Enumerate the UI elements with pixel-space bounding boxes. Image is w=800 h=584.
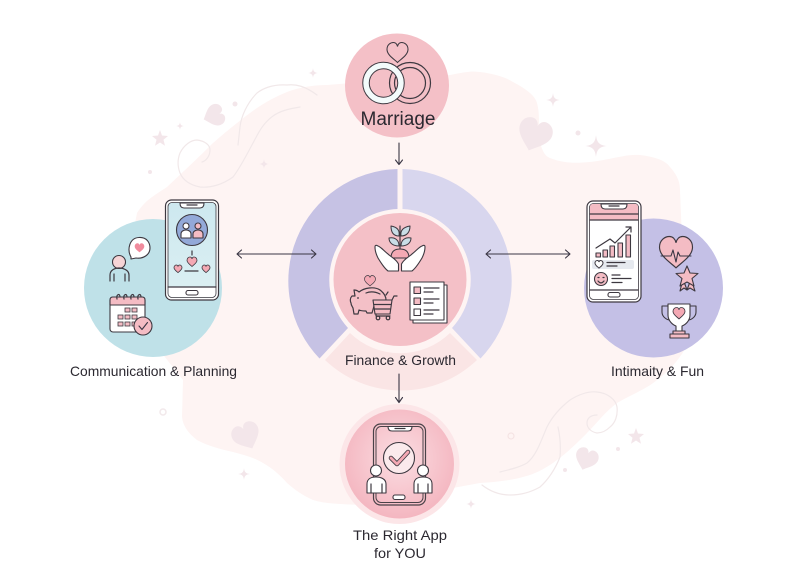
icon: trophy: [662, 304, 696, 338]
swirl: top left spiral: [178, 107, 300, 187]
arrow: Marriage to centre: [396, 143, 402, 164]
circle: [345, 34, 449, 138]
swirl: bottom right: [482, 427, 560, 495]
label: Communication & Planning: [70, 363, 237, 379]
heart: top left: [200, 102, 227, 130]
swirl: top left: [238, 85, 317, 145]
icon: person left: [367, 465, 386, 493]
swirl: bottom right spiral: [500, 392, 617, 472]
arrow: centre to right panel: [486, 250, 570, 258]
background decorations: [148, 68, 644, 509]
icon: piggy bank and cart: [350, 276, 397, 320]
label: Intimaity & Fun: [611, 363, 704, 379]
heart: bottom left: [228, 418, 265, 454]
icon: plant in hands: [375, 226, 425, 271]
panel: The Right App for YOU: [340, 404, 460, 561]
background blob: [120, 72, 690, 505]
icon: phone: [166, 200, 218, 300]
icon: checklist: [410, 282, 447, 323]
icon: heart: [387, 42, 408, 62]
label: Finance & Growth: [345, 352, 456, 368]
icon: calendar: [110, 295, 145, 332]
label: The Right App: [353, 527, 447, 543]
heart: top right: [513, 114, 556, 156]
icon: person: [110, 256, 129, 281]
icon: speech bubble: [129, 237, 150, 259]
icon: person right: [414, 465, 432, 493]
ring segment: bottom: [325, 333, 477, 390]
ring segment: right: [402, 169, 512, 358]
centre disc: [334, 213, 466, 346]
label: Marriage: [360, 109, 436, 130]
avatar: [176, 214, 208, 246]
halo: [340, 404, 460, 524]
panel: Communication & Planning: [70, 200, 237, 379]
circle: [84, 219, 222, 357]
icon: star award: [676, 266, 698, 291]
arrow: centre to The Right App: [396, 374, 402, 402]
sparkles: [148, 68, 644, 509]
circle: [345, 410, 454, 518]
icon: check badge: [134, 317, 152, 335]
icon: phone with check: [374, 424, 426, 505]
panel: centre ring: [288, 169, 512, 390]
arrow: left panel to centre: [237, 250, 316, 258]
ring segment: left: [288, 169, 398, 358]
heart: bottom right: [572, 445, 601, 474]
icon: wedding rings: [366, 62, 430, 104]
icon: heart rate: [660, 236, 692, 268]
icon: phone with chart: [587, 201, 641, 302]
circle: [584, 218, 723, 358]
panel: Marriage: [345, 34, 449, 138]
panel: The Right App for YOU: for YOU: [374, 545, 426, 561]
panel: Intimaity & Fun: [584, 201, 723, 379]
